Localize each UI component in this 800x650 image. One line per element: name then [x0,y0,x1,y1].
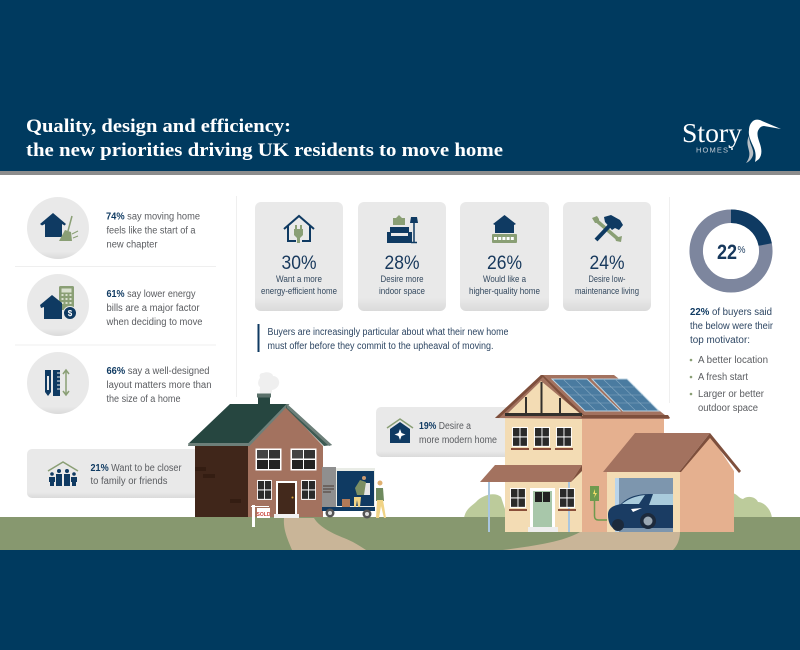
label: Would like a [483,274,527,285]
bushes [464,493,772,518]
person in truck [354,476,366,507]
donut chart: 22% [696,216,766,286]
icon: house and stars [492,215,517,243]
text: 22% motivators: 22% of buyers said [690,307,772,318]
vertical dividers [15,196,670,403]
door [274,481,299,518]
card: 26% [460,202,549,311]
label: Want a more [276,274,322,285]
illustration: old house [188,372,332,527]
icon: house with plug [284,216,314,243]
windows [256,448,282,470]
door [528,488,558,532]
roof [188,404,287,444]
title: Quality, design and efficiency: [26,116,291,137]
panel: priority cards [255,202,651,311]
panel: left stats [27,197,212,414]
title: the new priorities driving UK residents to move home [26,140,503,161]
card: 30% [255,202,343,311]
text: 19% Desire a [419,421,471,432]
card: 28%: 28% [384,253,420,274]
text: more modern home [419,435,497,446]
text: 22% motivators: top motivator: [690,335,750,346]
card: 21% family [27,449,199,498]
label [469,274,540,297]
label [575,274,639,297]
ground [0,517,800,550]
bullet list: Larger or better [698,389,765,400]
text [106,212,200,250]
stat: 66% layout [27,352,212,414]
icon: hammer and spanner [592,215,623,242]
card: 30%: 30% [282,253,317,274]
logo: Story Homes [682,118,781,163]
person outside [376,480,386,518]
card: 24%: 24% [590,253,625,274]
text [106,366,212,405]
label [379,274,425,297]
driveways [284,518,680,550]
label: energy-efficient home [261,286,337,297]
icon: house and calculator: $ [68,309,73,318]
illustration: removal truck and people [322,467,386,518]
header band [0,0,800,175]
illustration: garage and car [603,433,741,532]
text: 22% motivators [690,307,774,414]
title [26,116,503,161]
walls [582,417,664,532]
text [90,463,182,487]
text: 22% motivators: the below were their [690,321,774,332]
text: 74% say moving home [106,212,200,222]
donut chart: 22%: % [738,245,746,256]
bullet list: A better location [698,355,768,366]
card: 19% modern [376,407,516,457]
text: 66% say a well-designed [106,366,210,377]
callout: buyers [258,324,509,352]
walls [195,446,249,517]
donut chart: 22%: 22 [717,241,737,264]
icon: house and calculator [27,274,89,336]
logo: Story Homes: Story [682,118,743,148]
EV charger [590,486,610,520]
text: to family or friends [90,476,168,487]
text: 61% say lower energy [106,289,196,300]
sign: sold: SOLD [257,512,271,518]
icon: house with sparkle [387,419,413,443]
icon: family under roof [48,462,78,486]
stat: 61% energy bills [27,274,203,336]
card: 24% [563,202,651,311]
text [106,289,203,328]
bullet list: outdoor space [698,403,758,414]
car [608,494,673,531]
upper windows [512,427,528,447]
bullet list [690,355,768,414]
text: feels like the start of a [106,226,196,236]
text: layout matters more than [106,380,212,391]
icon: house and broom [27,197,89,259]
text: 21% Want to be closer [90,463,182,474]
text: the size of a home [106,394,181,405]
logo: Story Homes: HOMES [696,146,728,154]
label: indoor space [379,286,425,297]
card: 28% [358,202,446,311]
label: Desire low- [588,274,626,285]
text [419,421,497,446]
icon: sofa and lamp [387,215,418,243]
smoke [258,372,279,395]
chimney [257,394,271,408]
icon: pencil, ruler, arrow [27,352,89,414]
label: maintenance living [575,286,639,297]
card: 26%: 26% [487,253,522,274]
bottom band [0,550,800,650]
porch [480,465,582,532]
text: new chapter [106,240,158,250]
illustration: new house [480,375,670,532]
solar panels [552,379,659,411]
text: bills are a major factor [106,303,200,314]
label [261,274,337,297]
label: Desire more [380,274,424,285]
sign: sold [251,505,271,527]
main roof [495,375,670,419]
callout: buyers: must offer before they commit to the upheaval of moving. [268,341,494,352]
text: when deciding to move [106,317,203,328]
label: higher-quality home [469,286,540,297]
stat: 74% new chapter [27,197,200,259]
bullet list: A fresh start [698,372,748,383]
callout: buyers: Buyers are increasingly particular about what their new home [268,327,509,338]
